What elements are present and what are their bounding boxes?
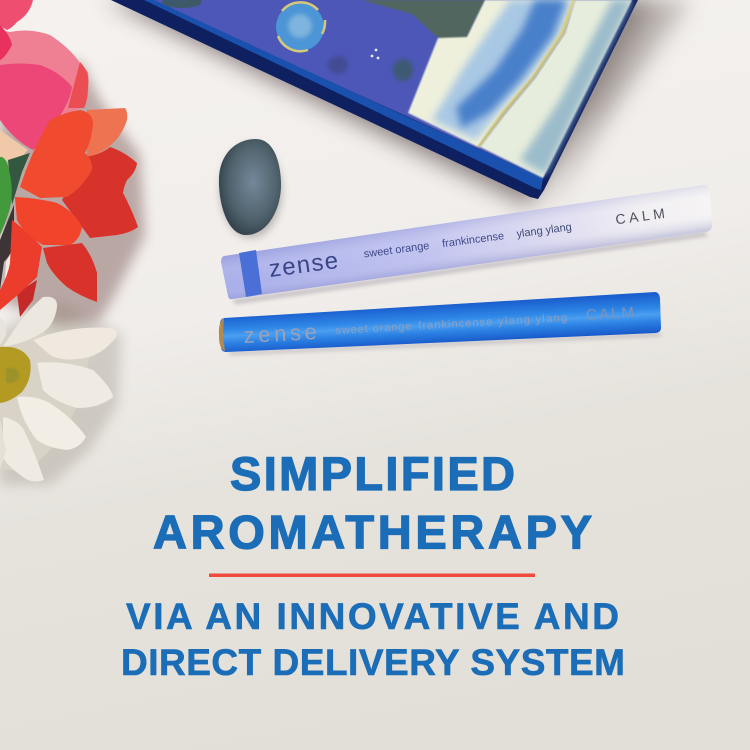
petal: salmon top: [87, 108, 127, 157]
stone: [219, 139, 282, 238]
pale tube labels: zense: [267, 247, 341, 283]
white daisy: [0, 297, 117, 481]
blue tube body: [220, 292, 661, 352]
daisy centre: [0, 347, 31, 403]
red divider: [209, 574, 535, 577]
pale tube labels: frankincense: [441, 230, 505, 250]
blue tube labels: CALM: [586, 304, 634, 324]
painting dark green patch: [362, 0, 485, 44]
subtitle line 2: DIRECT DELIVERY SYSTEM: [121, 642, 625, 683]
book with painted cover: [111, 0, 638, 199]
pale tube body: [221, 185, 712, 299]
blue tube labels: frankincense: [418, 316, 493, 332]
pale tube labels: sweet orange: [363, 240, 430, 261]
book cover painting: [150, 0, 632, 178]
blue tube: zense CALM: [219, 292, 661, 352]
shadow: book and flowers: [0, 0, 690, 485]
pale tube: zense CALM: [221, 185, 712, 299]
petal: left lower: [0, 220, 42, 310]
pale tube labels: ylang ylang: [516, 221, 573, 240]
blue tube labels: ylang ylang: [498, 312, 567, 328]
petal: deep red right: [62, 147, 138, 238]
painting circle: [276, 2, 325, 51]
subtitle line 1: VIA AN INNOVATIVE AND: [126, 596, 619, 637]
petal: small dark: [17, 280, 37, 317]
painting pale band: [480, 0, 632, 178]
blue tube labels: sweet orange: [335, 321, 412, 337]
title line 1: SIMPLIFIED: [230, 447, 515, 500]
blue tube labels: zense: [243, 319, 319, 348]
red flower back petals: [17, 108, 138, 317]
painting small marks: [162, 0, 413, 81]
pale tube blue band: [239, 250, 262, 297]
title: simplified aromatherapy: [153, 447, 592, 558]
pale tube labels: CALM: [614, 205, 669, 227]
blue tube labels: [243, 301, 635, 348]
shadows under tubes: [228, 232, 708, 355]
green leaf and stem: [0, 153, 30, 292]
title line 2: AROMATHERAPY: [153, 506, 592, 558]
petal: deep red lower: [43, 243, 97, 302]
daisy petals: [3, 297, 57, 347]
petal: upper main: [20, 110, 93, 198]
flowers: [0, 0, 138, 481]
subtitle: delivery system: [121, 596, 625, 683]
painting cream and blue band: [408, 0, 575, 148]
pale tube labels: [267, 204, 671, 283]
daisy base: [0, 330, 90, 470]
book dark side: [111, 0, 638, 199]
pink flower: [0, 0, 89, 165]
book blue rim: [144, 0, 543, 190]
red flower front petals: [0, 110, 93, 310]
petal: middle: [15, 197, 82, 245]
blue tube brass end: [219, 318, 225, 351]
